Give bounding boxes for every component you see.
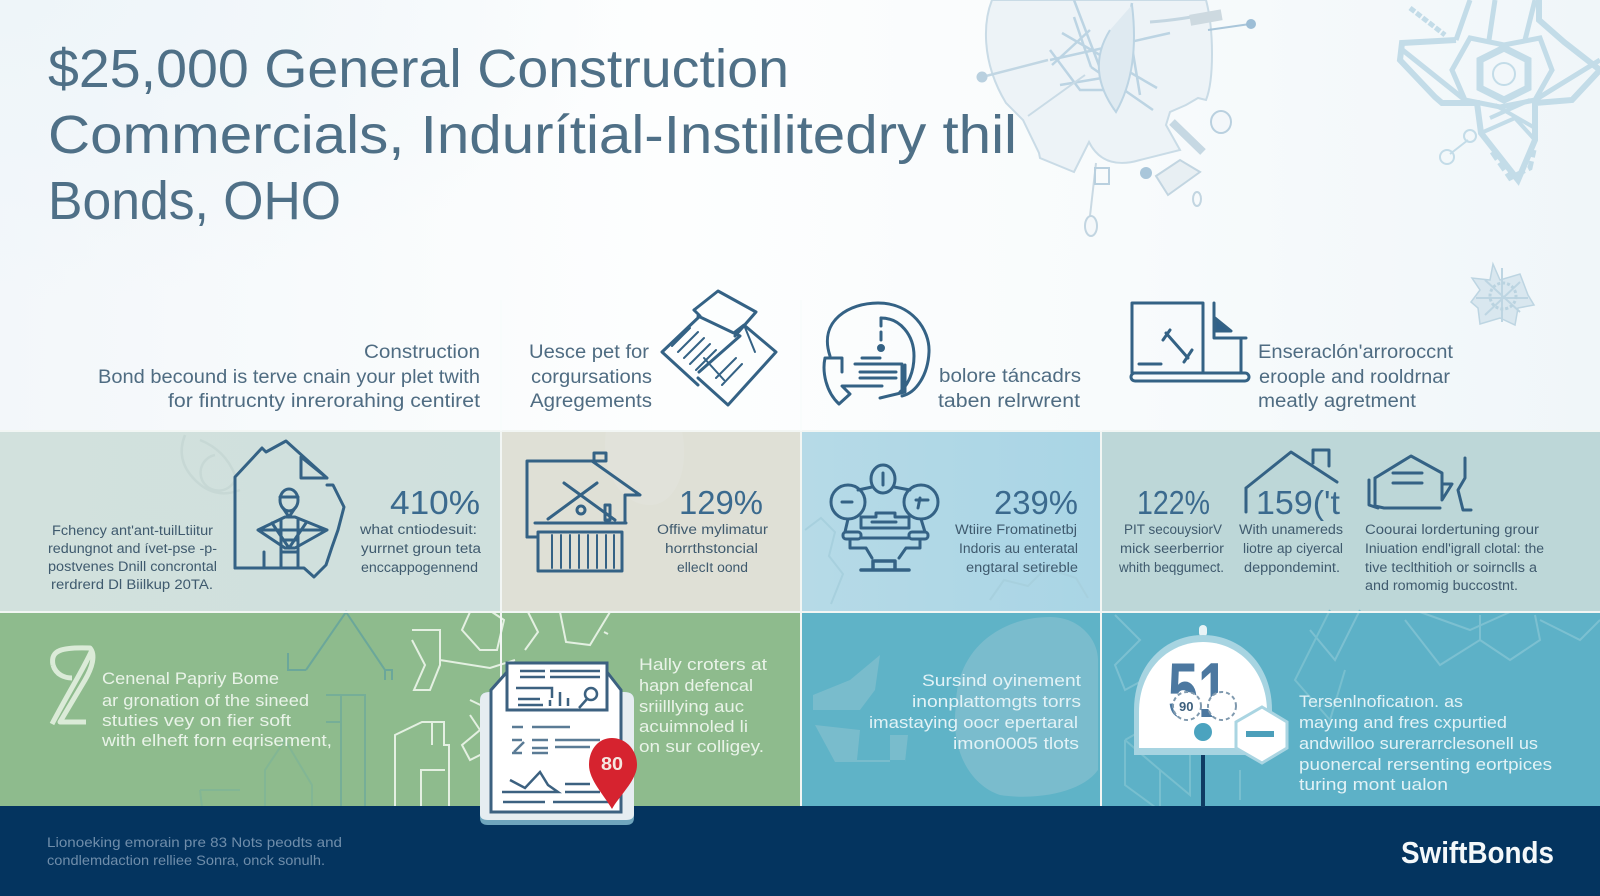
stat: 410%: 410% bbox=[390, 484, 480, 521]
panel: row 3 green bbox=[0, 612, 801, 807]
stat: 239%: 239% bbox=[994, 484, 1078, 521]
panel: row 2 cell 1 bbox=[0, 431, 501, 612]
text block: hally croters bbox=[639, 655, 767, 756]
panel: top header background bbox=[0, 0, 1600, 431]
text block: enseracion: eroople and rooldrnar bbox=[1259, 367, 1451, 388]
text block: enseracion bbox=[1258, 342, 1454, 412]
text block: coourai: Coourai lordertuning grour bbox=[1365, 522, 1540, 537]
text block: stat four description: whith beqgumect. bbox=[1118, 560, 1224, 575]
text block: fchency: Fchency ant'ant-tuilLtiitur bbox=[52, 523, 214, 538]
text block: tersen: andwilloo surerarrclesonell us bbox=[1299, 734, 1538, 753]
text block: sursind: imastaying oocr epertaral bbox=[869, 713, 1078, 732]
text block: stat four description: mick seerberrior bbox=[1120, 541, 1225, 556]
text block: coourai: tive teclthitioh or soirnclls a bbox=[1365, 560, 1538, 575]
stat: 122%: 122% bbox=[1137, 484, 1210, 521]
footer disclaimer bbox=[47, 834, 342, 868]
text block: sursind: inonplattomgts torrs bbox=[912, 692, 1081, 711]
icon: report document with pin bbox=[480, 663, 637, 825]
text block: enseracion: Enseraclón'arroroccnt bbox=[1258, 342, 1454, 363]
text block: stat two description: Offive mylimatur bbox=[657, 522, 769, 537]
text block: bolore: taben relrwrent bbox=[938, 391, 1081, 412]
logo: SwiftBonds: SwiftBonds bbox=[1401, 835, 1554, 870]
text block: stat five description bbox=[1239, 522, 1343, 575]
text block: sursind bbox=[869, 671, 1081, 753]
text block: agreements: corgursations bbox=[531, 367, 652, 388]
icon: tablet with page bbox=[1131, 303, 1249, 381]
text block: fchency: rerdrerd Dl Biilkup 20TA. bbox=[51, 577, 213, 592]
icon: house roof with number bbox=[1246, 450, 1337, 512]
text block: stat three description: engtaral setireble bbox=[966, 560, 1078, 575]
text block: construction intro: for fintrucnty inrerorahing centiret bbox=[168, 391, 481, 412]
text block: tersen: turing mont ualon bbox=[1299, 775, 1448, 794]
text block: hally croters: on sur colligey. bbox=[639, 737, 764, 756]
panel: row 3 teal centre bbox=[801, 612, 1101, 807]
text block: general paprty: Cenenal Papriy Bome bbox=[102, 669, 279, 688]
icon: circular badge bbox=[824, 303, 929, 404]
icon: dome gauge with hexagon: 90 bbox=[1179, 699, 1193, 714]
panel: row 3 teal right bbox=[1101, 610, 1600, 807]
footer disclaimer: condlemdaction relliee Sonra, onck sonulh. bbox=[47, 852, 325, 868]
icon: dome gauge with hexagon bbox=[1134, 625, 1287, 807]
title: Commercials, Indurítial-Instilitedry thil bbox=[48, 105, 1017, 165]
title: $25,000 General Construction bbox=[48, 39, 789, 99]
text block: stat one description: enccappogennend bbox=[361, 560, 478, 575]
icon: dome gauge with hexagon: 51 bbox=[1168, 646, 1228, 734]
text block: tersen: Tersenlnoficatıon. as bbox=[1299, 692, 1463, 711]
text block: general paprty: ar gronation of the sineed bbox=[102, 691, 309, 710]
text block: agreements: Agregements bbox=[530, 391, 652, 412]
icon: house with garage bbox=[527, 453, 640, 571]
decoration: star flake top right bbox=[1400, 0, 1600, 180]
text block: fchency: postvenes Dnill concrontal bbox=[48, 559, 217, 574]
text block: sursind: imon0005 tlots bbox=[953, 734, 1079, 753]
text block: coourai: and romomig buccostnt. bbox=[1365, 578, 1518, 593]
text block: stat two description: horrthstoncial bbox=[665, 541, 758, 556]
text block: stat one description bbox=[359, 522, 482, 575]
text block: stat two description: ellecIt oond bbox=[677, 560, 748, 575]
text block: stat five description: With unamereds bbox=[1239, 522, 1343, 537]
text block: stat five description: deppondemint. bbox=[1244, 560, 1340, 575]
text block: bolore bbox=[938, 366, 1081, 412]
text block: stat five description: liotre ap ciyercal bbox=[1243, 541, 1343, 556]
text block: sursind: Sursind oyinement bbox=[922, 671, 1081, 690]
text block: agreements bbox=[529, 342, 652, 412]
decoration: compass circle illustration bbox=[976, 0, 1256, 236]
text block: hally croters: hapn defencal bbox=[639, 676, 753, 695]
text block: hally croters: sriilllying auc bbox=[639, 697, 745, 716]
text block: stat two description bbox=[657, 522, 769, 575]
decoration: small snow flake bbox=[1471, 264, 1534, 325]
text block: hally croters: acuimnoled li bbox=[639, 717, 748, 736]
icon: network of gauges bbox=[831, 465, 938, 570]
title: Bonds, OHO bbox=[48, 171, 341, 231]
text block: stat one description: what cntiodesuit: bbox=[359, 522, 477, 537]
text block: bolore: bolore táncadrs bbox=[939, 366, 1081, 387]
panel: footer bbox=[0, 806, 1600, 896]
text block: stat four description: PIT secouysiorV bbox=[1124, 522, 1222, 537]
title bbox=[48, 39, 1017, 231]
panel: row 2 cell 4 bbox=[1101, 431, 1600, 612]
text block: fchency: redungnot and ívet-pse -p- bbox=[48, 541, 217, 556]
panel: row 2 cell 3 bbox=[801, 431, 1101, 612]
text block: coourai bbox=[1365, 522, 1544, 593]
text block: stat four description bbox=[1118, 522, 1225, 575]
text block: tersen: puonercal rersenting eortpices bbox=[1299, 755, 1552, 774]
text block: fchency bbox=[48, 523, 217, 592]
text block: construction intro: Construction bbox=[364, 342, 480, 363]
text block: enseracion: meatly agretment bbox=[1258, 391, 1417, 412]
stat: 159%: 159('t bbox=[1256, 484, 1340, 521]
text block: stat three description: Indoris au enteratal bbox=[959, 541, 1078, 556]
text block: stat one description: yurrnet groun teta bbox=[361, 541, 482, 556]
icon: worker in house outline bbox=[235, 441, 344, 577]
text block: coourai: Iniuation endl'igrall clotal: the bbox=[1365, 541, 1544, 556]
text block: agreements: Uesce pet for bbox=[529, 342, 650, 363]
footer disclaimer: Lionoeking emorain pre 83 Nots peodts and bbox=[47, 834, 342, 850]
icon: envelope and bracket bbox=[1369, 456, 1471, 510]
text block: tersen: mayıng and fres cxpurtied bbox=[1299, 713, 1507, 732]
text block: general paprty: stuties vey on fier soft bbox=[102, 711, 291, 730]
grid dividers bbox=[0, 300, 1600, 806]
text block: general paprty bbox=[101, 669, 332, 750]
icon: large numeral two bbox=[52, 648, 93, 724]
panel: row 2 cell 2 bbox=[501, 431, 801, 612]
text block: construction intro: Bond becound is terve cnain your plet twith bbox=[98, 367, 480, 388]
text block: construction intro bbox=[98, 342, 481, 412]
text block: stat three description: Wtiire Fromatinetbj bbox=[955, 522, 1077, 537]
text block: tersen bbox=[1299, 692, 1552, 794]
icon: report document with pin: 80 bbox=[601, 754, 623, 774]
icon: documents bbox=[662, 291, 776, 405]
stat: 129%: 129% bbox=[679, 484, 763, 521]
text block: general paprty: with elheft forn eqrisement, bbox=[101, 731, 332, 750]
text block: hally croters: Hally croters at bbox=[639, 655, 767, 674]
text block: stat three description bbox=[955, 522, 1078, 575]
